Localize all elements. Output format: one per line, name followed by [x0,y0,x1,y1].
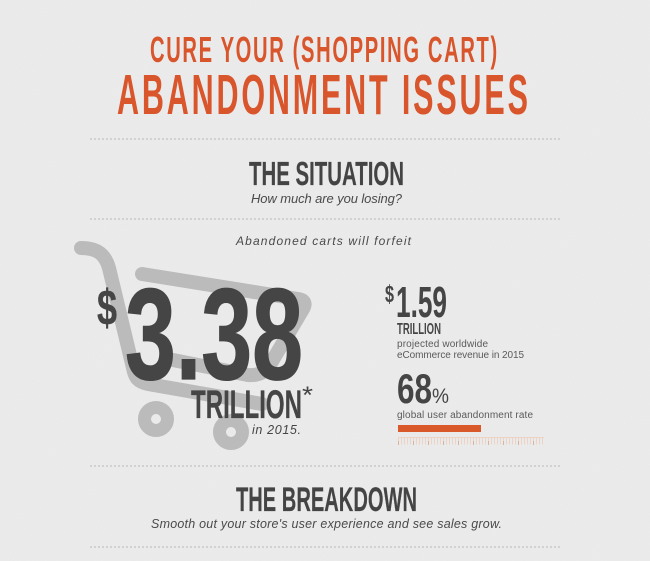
section heading: the situation [249,155,404,206]
stat: 68 percent abandonment [397,365,533,421]
stat: 1.59 trillion revenue: TRILLION [397,321,441,338]
stat: 1.59 trillion revenue: eCommerce revenue in 2015 [397,350,524,361]
main figure: 3.38 trillion [97,261,313,437]
stat: 68 percent abandonment: global user abandonment rate [397,410,533,421]
title: ABANDONMENT ISSUES [117,63,528,126]
section heading: the situation: THE SITUATION [249,155,404,192]
section heading: the breakdown [151,481,502,531]
section heading: the breakdown: THE BREAKDOWN [236,481,417,519]
icon: shopping cart [81,248,305,444]
title [117,31,528,126]
stat: 1.59 trillion revenue: $ [385,281,394,308]
section heading: the situation: How much are you losing? [251,191,403,206]
stat: 68 percent abandonment: 68 [397,365,432,412]
stat: 1.59 trillion revenue: projected worldwide [397,339,488,350]
main figure: 3.38 trillion: 3.38 [125,261,303,407]
intro text: Abandoned carts will forfeit [235,234,412,248]
main figure: 3.38 trillion: in 2015. [252,423,301,437]
progress bar: 68 percent [398,425,481,432]
main figure: 3.38 trillion: TRILLION [191,383,302,427]
stat: 68 percent abandonment: % [432,385,449,408]
title: CURE YOUR (SHOPPING CART) [150,31,497,71]
ruler scale [398,438,544,443]
main figure: 3.38 trillion: * [302,382,313,409]
section heading: the breakdown: Smooth out your store's user experience and see sales grow. [151,517,502,531]
stat: 1.59 trillion revenue: 1.59 [396,278,447,327]
stat: 1.59 trillion revenue [385,278,524,361]
main figure: 3.38 trillion: $ [97,280,117,336]
